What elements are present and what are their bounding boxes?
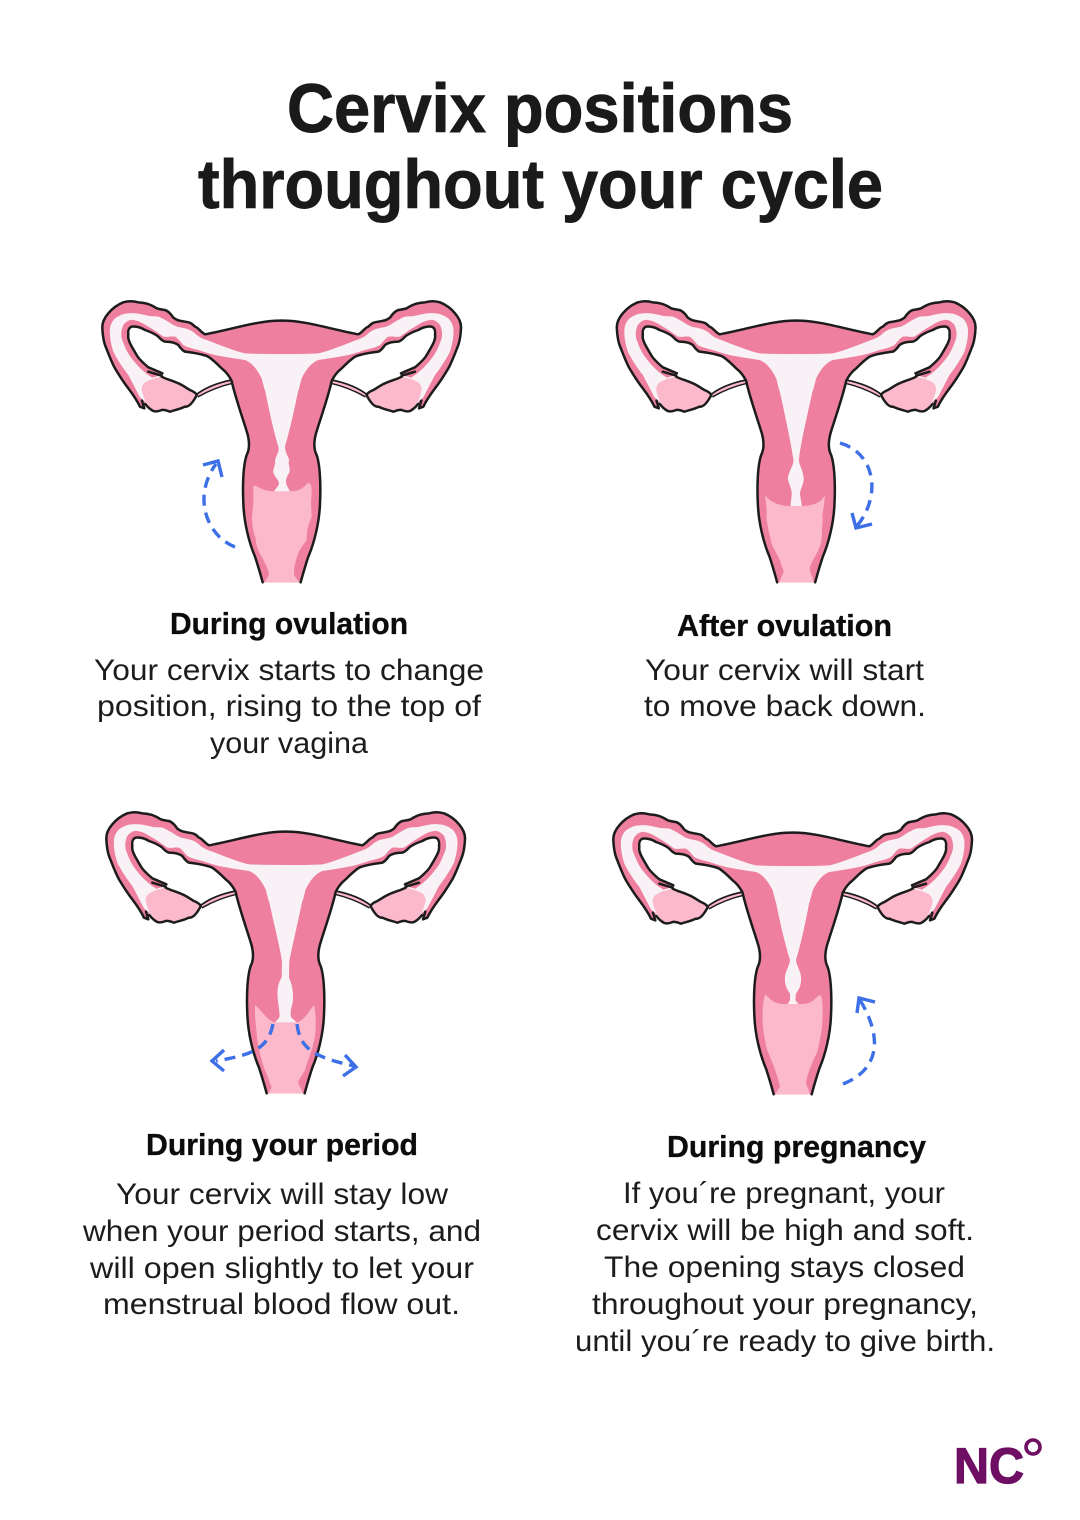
- text block: during pregnancy: The opening stays closed: [604, 1251, 965, 1284]
- illustration: uterus with cervix descending: [617, 301, 976, 582]
- text block: during pregnancy: If you´re pregnant, your: [623, 1177, 945, 1210]
- text block: after ovulation: Your cervix will start: [645, 654, 925, 687]
- panel: after ovulation: [617, 301, 976, 723]
- arrow: curved upward: [203, 461, 235, 547]
- text block: during ovulation: [94, 654, 484, 760]
- heading: during ovulation: During ovulation: [170, 606, 408, 641]
- heading: during pregnancy: During pregnancy: [667, 1129, 927, 1164]
- title: throughout your cycle: [198, 146, 883, 223]
- panel: during your period: [82, 812, 481, 1321]
- text block: during pregnancy: until you´re ready to give birth.: [575, 1325, 995, 1358]
- text block: during ovulation: position, rising to the top of: [97, 690, 482, 723]
- title: Cervix positions: [287, 70, 793, 147]
- text block: during pregnancy: throughout your pregnancy,: [592, 1288, 978, 1321]
- text block: after ovulation: to move back down.: [644, 690, 926, 723]
- text block: during your period: Your cervix will stay low: [116, 1178, 448, 1211]
- panel: during ovulation: [94, 301, 484, 760]
- heading: during your period: During your period: [146, 1127, 418, 1162]
- illustration: uterus with cervix low and open: [106, 812, 465, 1093]
- heading: after ovulation: After ovulation: [677, 608, 892, 643]
- illustration: uterus with cervix high: [102, 301, 461, 582]
- text block: during pregnancy: cervix will be high and soft.: [596, 1214, 974, 1247]
- text block: during ovulation: your vagina: [210, 727, 368, 760]
- arrow: curved upward: [843, 998, 875, 1084]
- text block: during your period: menstrual blood flow out.: [103, 1288, 460, 1321]
- title: [198, 70, 883, 223]
- arrow: curved downward: [840, 443, 872, 528]
- text block: during your period: will open slightly to let your: [89, 1252, 474, 1285]
- text block: after ovulation: [644, 654, 926, 723]
- arrows: cervix opening outward: [212, 1024, 356, 1076]
- text block: during your period: [82, 1178, 481, 1321]
- text block: during ovulation: Your cervix starts to change: [94, 654, 484, 687]
- text block: during your period: when your period starts, and: [82, 1215, 481, 1248]
- logo: NC: NC: [954, 1438, 1024, 1494]
- text block: during pregnancy: [575, 1177, 995, 1358]
- illustration: uterus with cervix high and closed: [613, 813, 972, 1094]
- panel: during pregnancy: [575, 813, 995, 1358]
